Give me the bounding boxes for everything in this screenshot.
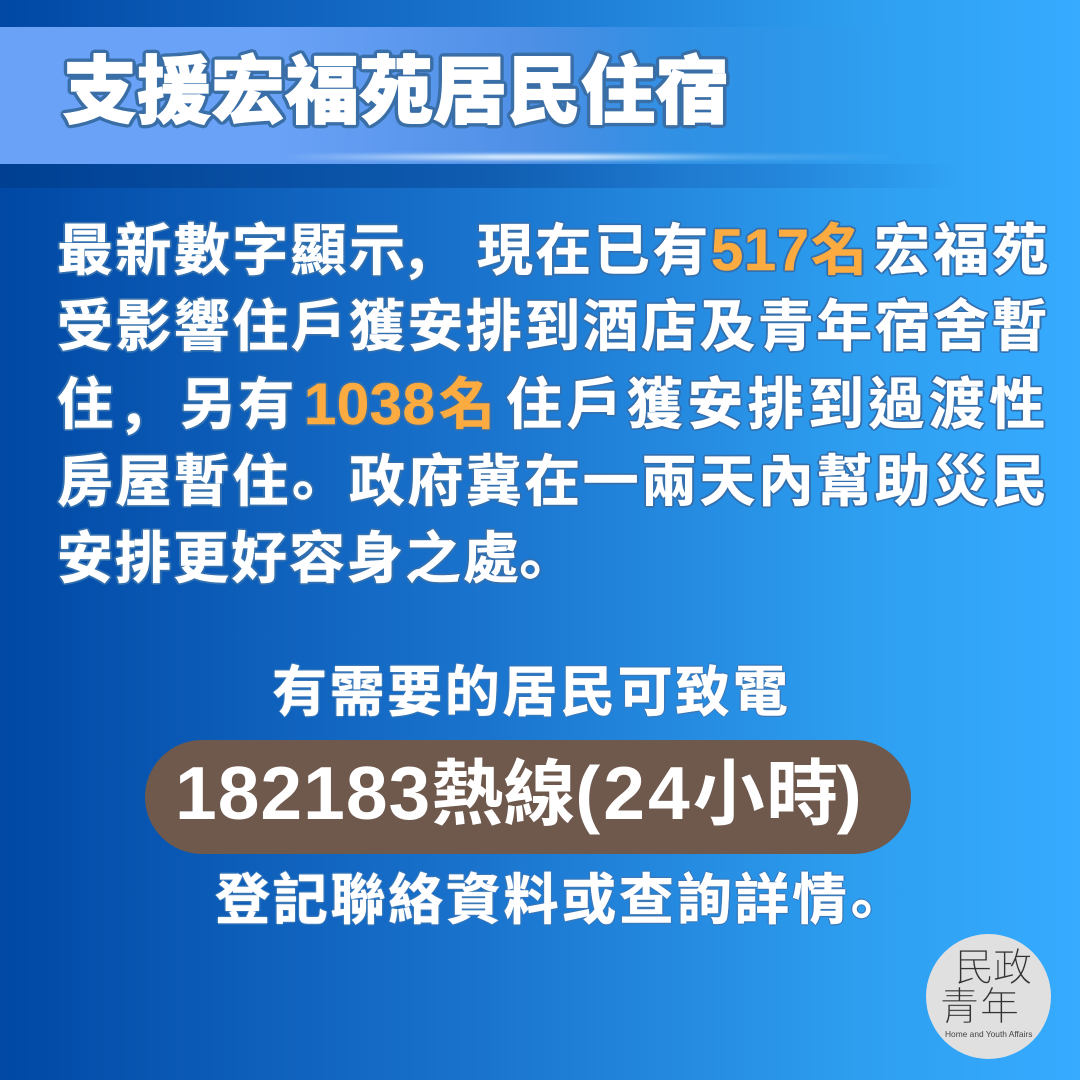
band shadow bbox=[0, 164, 960, 188]
header band bbox=[0, 27, 892, 188]
line 5: 安排更好容身之處。 bbox=[57, 527, 560, 603]
hotline pill bbox=[145, 740, 911, 854]
logo characters bottom: 青年 bbox=[940, 986, 1020, 1029]
logo english caption: Home and Youth Affairs bbox=[945, 1029, 1032, 1039]
line 4: 房屋暫住。 政府冀在一兩天內幫助災民 bbox=[57, 450, 1050, 524]
line 1: 最新數字顯示， bbox=[57, 219, 447, 301]
line 3: 另有 bbox=[180, 373, 297, 436]
line 2: 受影響住戶獲安排到酒店及青年宿舍暫 bbox=[57, 295, 1050, 358]
registration line: 登記聯絡資料或查詢詳情。 bbox=[215, 869, 891, 942]
line 1: 517 bbox=[711, 218, 810, 283]
title: 支援宏福苑居民住宿 bbox=[63, 50, 729, 133]
line 3: 1038 bbox=[304, 372, 435, 437]
line 3: 住， bbox=[57, 373, 164, 456]
body paragraph bbox=[56, 218, 1051, 603]
hotline text: 182183熱線(24小時) bbox=[175, 751, 862, 835]
line 1 bbox=[57, 218, 1051, 301]
line 3: 名 bbox=[439, 373, 497, 436]
line 3 bbox=[56, 372, 1050, 456]
line 1: 宏福苑 bbox=[874, 219, 1051, 282]
call to action line: 有需要的居民可致電 bbox=[272, 661, 790, 723]
logo characters top: 民政 bbox=[955, 947, 1031, 990]
line 3: 住戶獲安排到過渡性 bbox=[506, 373, 1050, 436]
glow line bbox=[280, 154, 900, 160]
band fill bbox=[0, 27, 900, 164]
logo bbox=[926, 934, 1051, 1059]
line 1: 名 bbox=[811, 219, 869, 282]
line 1: 現在已有 bbox=[477, 219, 711, 282]
